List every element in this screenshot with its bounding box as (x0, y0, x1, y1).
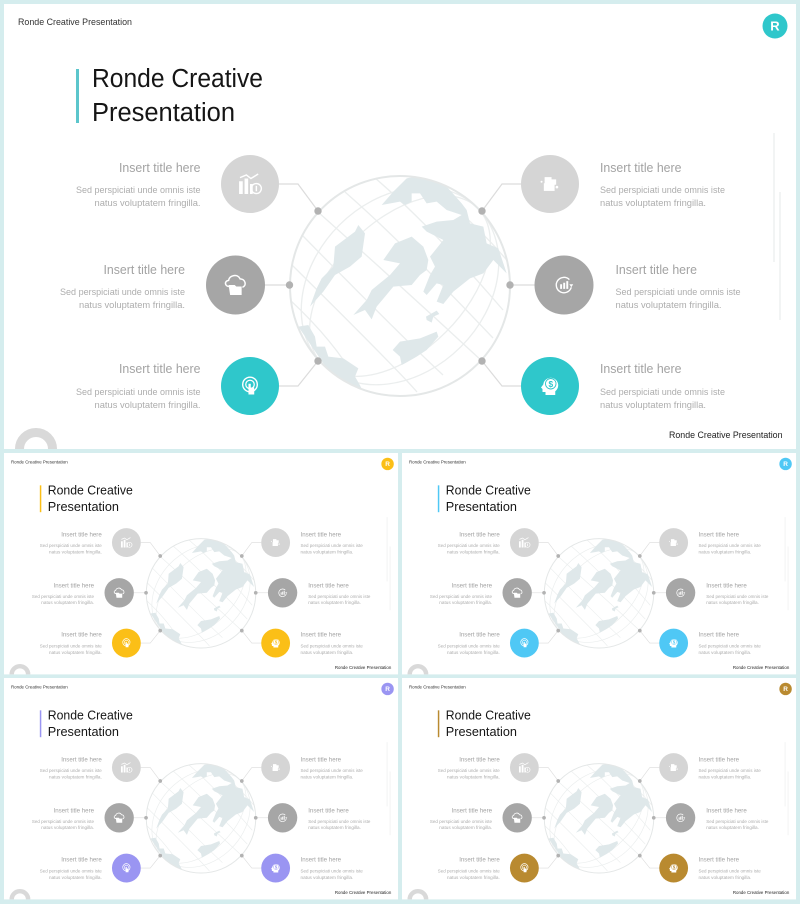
item: left middle (430, 578, 546, 607)
item: right top (240, 753, 363, 783)
item: right middle (652, 578, 769, 607)
item: right bottom: natus voluptatem fringilla. (699, 875, 751, 881)
item: right bottom: Insert title here (699, 857, 740, 864)
footer label: Ronde Creative Presentation (669, 430, 782, 441)
title (48, 483, 133, 514)
item: left middle: Insert title here (104, 263, 185, 277)
item: left top (438, 753, 560, 783)
item: right middle: Insert title here (308, 807, 349, 814)
item: right top: Insert title here (600, 161, 682, 175)
globe (132, 524, 270, 662)
logo badge (762, 14, 788, 38)
item: left bottom (40, 629, 162, 657)
item: right bottom: Sed perspiciati unde omnis iste (600, 387, 725, 398)
item: left middle: natus voluptatem fringilla. (41, 825, 94, 831)
item: right middle: Insert title here (308, 582, 349, 589)
footer label: Ronde Creative Presentation (733, 665, 790, 671)
globe (530, 524, 668, 662)
item: right top: natus voluptatem fringilla. (301, 549, 353, 555)
item: left bottom: natus voluptatem fringilla. (447, 875, 500, 881)
item: right top: Sed perspiciati unde omnis iste (301, 768, 363, 774)
item: left bottom (76, 357, 322, 415)
item: right middle: Sed perspiciati unde omnis iste (706, 594, 769, 600)
item: right bottom: Insert title here (301, 632, 342, 639)
item: right top (638, 528, 761, 558)
item: left top (40, 753, 162, 783)
item: right bottom: Insert title here (600, 362, 682, 376)
item: left top: Insert title here (459, 757, 500, 764)
decorative ring (408, 664, 428, 674)
decorative ring (15, 428, 57, 449)
title (92, 65, 263, 127)
item: right middle: Sed perspiciati unde omnis iste (308, 819, 371, 825)
item: right middle: Insert title here (706, 807, 747, 814)
panel: main slide teal (4, 4, 796, 466)
item: right top: Insert title here (301, 757, 342, 764)
item: left top: natus voluptatem fringilla. (447, 774, 500, 780)
item: right bottom: Sed perspiciati unde omnis iste (699, 644, 761, 650)
logo badge (381, 458, 394, 470)
logo badge (381, 683, 394, 695)
item: right top: natus voluptatem fringilla. (600, 198, 706, 209)
item: left middle: Sed perspiciati unde omnis iste (32, 594, 94, 600)
title accent bar (438, 710, 439, 737)
item: left bottom: Sed perspiciati unde omnis iste (438, 869, 500, 875)
item: left bottom: Sed perspiciati unde omnis iste (76, 387, 200, 398)
title: Presentation (446, 725, 517, 739)
item: right bottom (240, 854, 363, 882)
item: left middle: natus voluptatem fringilla. (439, 825, 492, 831)
item: right top (638, 753, 761, 783)
item: left middle: natus voluptatem fringilla. (439, 600, 492, 606)
logo badge: R (385, 686, 390, 693)
item: left bottom: natus voluptatem fringilla. (94, 400, 200, 411)
item: left bottom (40, 854, 162, 882)
item: right top: Sed perspiciati unde omnis iste (600, 185, 725, 196)
title accent bar (438, 485, 439, 512)
item: right middle: natus voluptatem fringilla. (308, 600, 361, 606)
logo badge (779, 458, 792, 470)
item: left bottom: Insert title here (459, 632, 500, 639)
title: Ronde Creative (446, 708, 531, 722)
item: right middle (254, 578, 371, 607)
item: left top: Insert title here (459, 532, 500, 539)
item: left middle: Sed perspiciati unde omnis iste (430, 594, 492, 600)
item: left top: Sed perspiciati unde omnis iste (76, 185, 200, 196)
item: right middle: Sed perspiciati unde omnis iste (616, 287, 740, 298)
title: Ronde Creative (446, 483, 531, 497)
title accent bar (76, 69, 79, 123)
item: left middle: Sed perspiciati unde omnis iste (60, 287, 185, 298)
panel: slide yellow (4, 453, 398, 683)
title: Presentation (446, 500, 517, 514)
item: right bottom (638, 629, 761, 657)
item: right bottom: natus voluptatem fringilla. (301, 875, 353, 881)
item: left bottom (438, 629, 560, 657)
item: left top: natus voluptatem fringilla. (49, 549, 102, 555)
decorative ring (410, 891, 426, 904)
item: left middle: natus voluptatem fringilla. (79, 300, 185, 311)
item: left middle: Sed perspiciati unde omnis iste (32, 819, 94, 825)
item: left bottom: Sed perspiciati unde omnis iste (438, 644, 500, 650)
item: left top (40, 528, 162, 558)
item: left middle: Sed perspiciati unde omnis iste (430, 819, 492, 825)
item: left top: Sed perspiciati unde omnis iste (40, 543, 102, 549)
footer label: Ronde Creative Presentation (733, 890, 790, 896)
item: right bottom (638, 854, 761, 882)
item: right bottom (478, 357, 725, 415)
header label: Ronde Creative Presentation (409, 684, 466, 690)
item: right middle: natus voluptatem fringilla. (706, 825, 759, 831)
item: right middle (506, 256, 740, 314)
item: left middle (60, 256, 293, 314)
title accent bar (40, 710, 41, 737)
title: Ronde Creative (48, 708, 133, 722)
item: right top: Insert title here (699, 757, 740, 764)
item: left top: natus voluptatem fringilla. (94, 198, 200, 209)
panel: slide brown (402, 678, 796, 904)
panel: slide blue (402, 453, 796, 683)
logo badge: R (783, 686, 788, 693)
item: right bottom: natus voluptatem fringilla. (301, 650, 353, 656)
item: left top (76, 155, 322, 215)
item: left top: Insert title here (61, 532, 102, 539)
item: left bottom: Insert title here (61, 857, 102, 864)
item: right middle: Insert title here (616, 263, 697, 277)
item: left bottom: Insert title here (61, 632, 102, 639)
item: left bottom: natus voluptatem fringilla. (447, 650, 500, 656)
item: right middle: Sed perspiciati unde omnis iste (308, 594, 371, 600)
decorative ring (12, 891, 28, 904)
title (446, 483, 531, 514)
item: right middle: natus voluptatem fringilla. (308, 825, 361, 831)
item: right middle: Sed perspiciati unde omnis iste (706, 819, 769, 825)
item: right top: natus voluptatem fringilla. (699, 549, 751, 555)
item: right bottom: Sed perspiciati unde omnis iste (301, 869, 363, 875)
item: left middle: Insert title here (54, 582, 95, 589)
item: right middle: natus voluptatem fringilla. (706, 600, 759, 606)
globe (132, 749, 270, 887)
item: right bottom: Sed perspiciati unde omnis iste (301, 644, 363, 650)
item: left top: natus voluptatem fringilla. (447, 549, 500, 555)
header label: Ronde Creative Presentation (11, 459, 68, 465)
globe (530, 749, 668, 887)
item: right top: Sed perspiciati unde omnis iste (699, 543, 761, 549)
item: left top: Sed perspiciati unde omnis iste (40, 768, 102, 774)
footer label: Ronde Creative Presentation (335, 890, 392, 896)
item: right bottom: Sed perspiciati unde omnis iste (699, 869, 761, 875)
header label: Ronde Creative Presentation (11, 684, 68, 690)
item: right bottom: Insert title here (699, 632, 740, 639)
logo badge: R (783, 461, 788, 468)
title: Presentation (92, 99, 235, 127)
logo badge: R (770, 18, 780, 34)
item: left top: Insert title here (61, 757, 102, 764)
item: left top: Sed perspiciati unde omnis iste (438, 768, 500, 774)
item: left middle (430, 803, 546, 832)
item: right middle (652, 803, 769, 832)
item: right top: Insert title here (699, 532, 740, 539)
item: right top: Sed perspiciati unde omnis iste (301, 543, 363, 549)
logo badge: R (385, 461, 390, 468)
item: right middle (254, 803, 371, 832)
item: left top: Insert title here (119, 161, 201, 175)
item: left middle (32, 803, 148, 832)
globe (261, 147, 539, 425)
title: Ronde Creative (48, 483, 133, 497)
item: right middle: Insert title here (706, 582, 747, 589)
logo badge (779, 683, 792, 695)
item: right top: natus voluptatem fringilla. (301, 774, 353, 780)
item: left bottom: Sed perspiciati unde omnis iste (40, 869, 102, 875)
item: left middle: Insert title here (452, 807, 493, 814)
item: right bottom: Insert title here (301, 857, 342, 864)
item: left bottom (438, 854, 560, 882)
item: right bottom: natus voluptatem fringilla. (600, 400, 706, 411)
item: left top: Sed perspiciati unde omnis iste (438, 543, 500, 549)
item: right bottom: natus voluptatem fringilla. (699, 650, 751, 656)
item: right top: natus voluptatem fringilla. (699, 774, 751, 780)
title accent bar (40, 485, 41, 512)
item: right bottom (240, 629, 363, 657)
header label: Ronde Creative Presentation (18, 17, 132, 28)
item: left bottom: Insert title here (459, 857, 500, 864)
item: left middle: Insert title here (452, 582, 493, 589)
title (446, 708, 531, 739)
item: left top: natus voluptatem fringilla. (49, 774, 102, 780)
item: right top: Insert title here (301, 532, 342, 539)
footer label: Ronde Creative Presentation (335, 665, 392, 671)
title: Ronde Creative (92, 65, 263, 93)
title (48, 708, 133, 739)
item: left bottom: Insert title here (119, 362, 201, 376)
item: right top: Sed perspiciati unde omnis iste (699, 768, 761, 774)
header label: Ronde Creative Presentation (409, 459, 466, 465)
item: right top (478, 155, 725, 215)
title: Presentation (48, 725, 119, 739)
item: left middle: natus voluptatem fringilla. (41, 600, 94, 606)
item: left middle: Insert title here (54, 807, 95, 814)
item: left bottom: natus voluptatem fringilla. (49, 875, 102, 881)
item: right middle: natus voluptatem fringilla. (616, 300, 722, 311)
decorative ring (10, 664, 30, 674)
item: left bottom: Sed perspiciati unde omnis iste (40, 644, 102, 650)
title: Presentation (48, 500, 119, 514)
item: left bottom: natus voluptatem fringilla. (49, 650, 102, 656)
item: right top (240, 528, 363, 558)
item: left middle (32, 578, 148, 607)
panel: slide purple (4, 678, 398, 904)
item: left top (438, 528, 560, 558)
